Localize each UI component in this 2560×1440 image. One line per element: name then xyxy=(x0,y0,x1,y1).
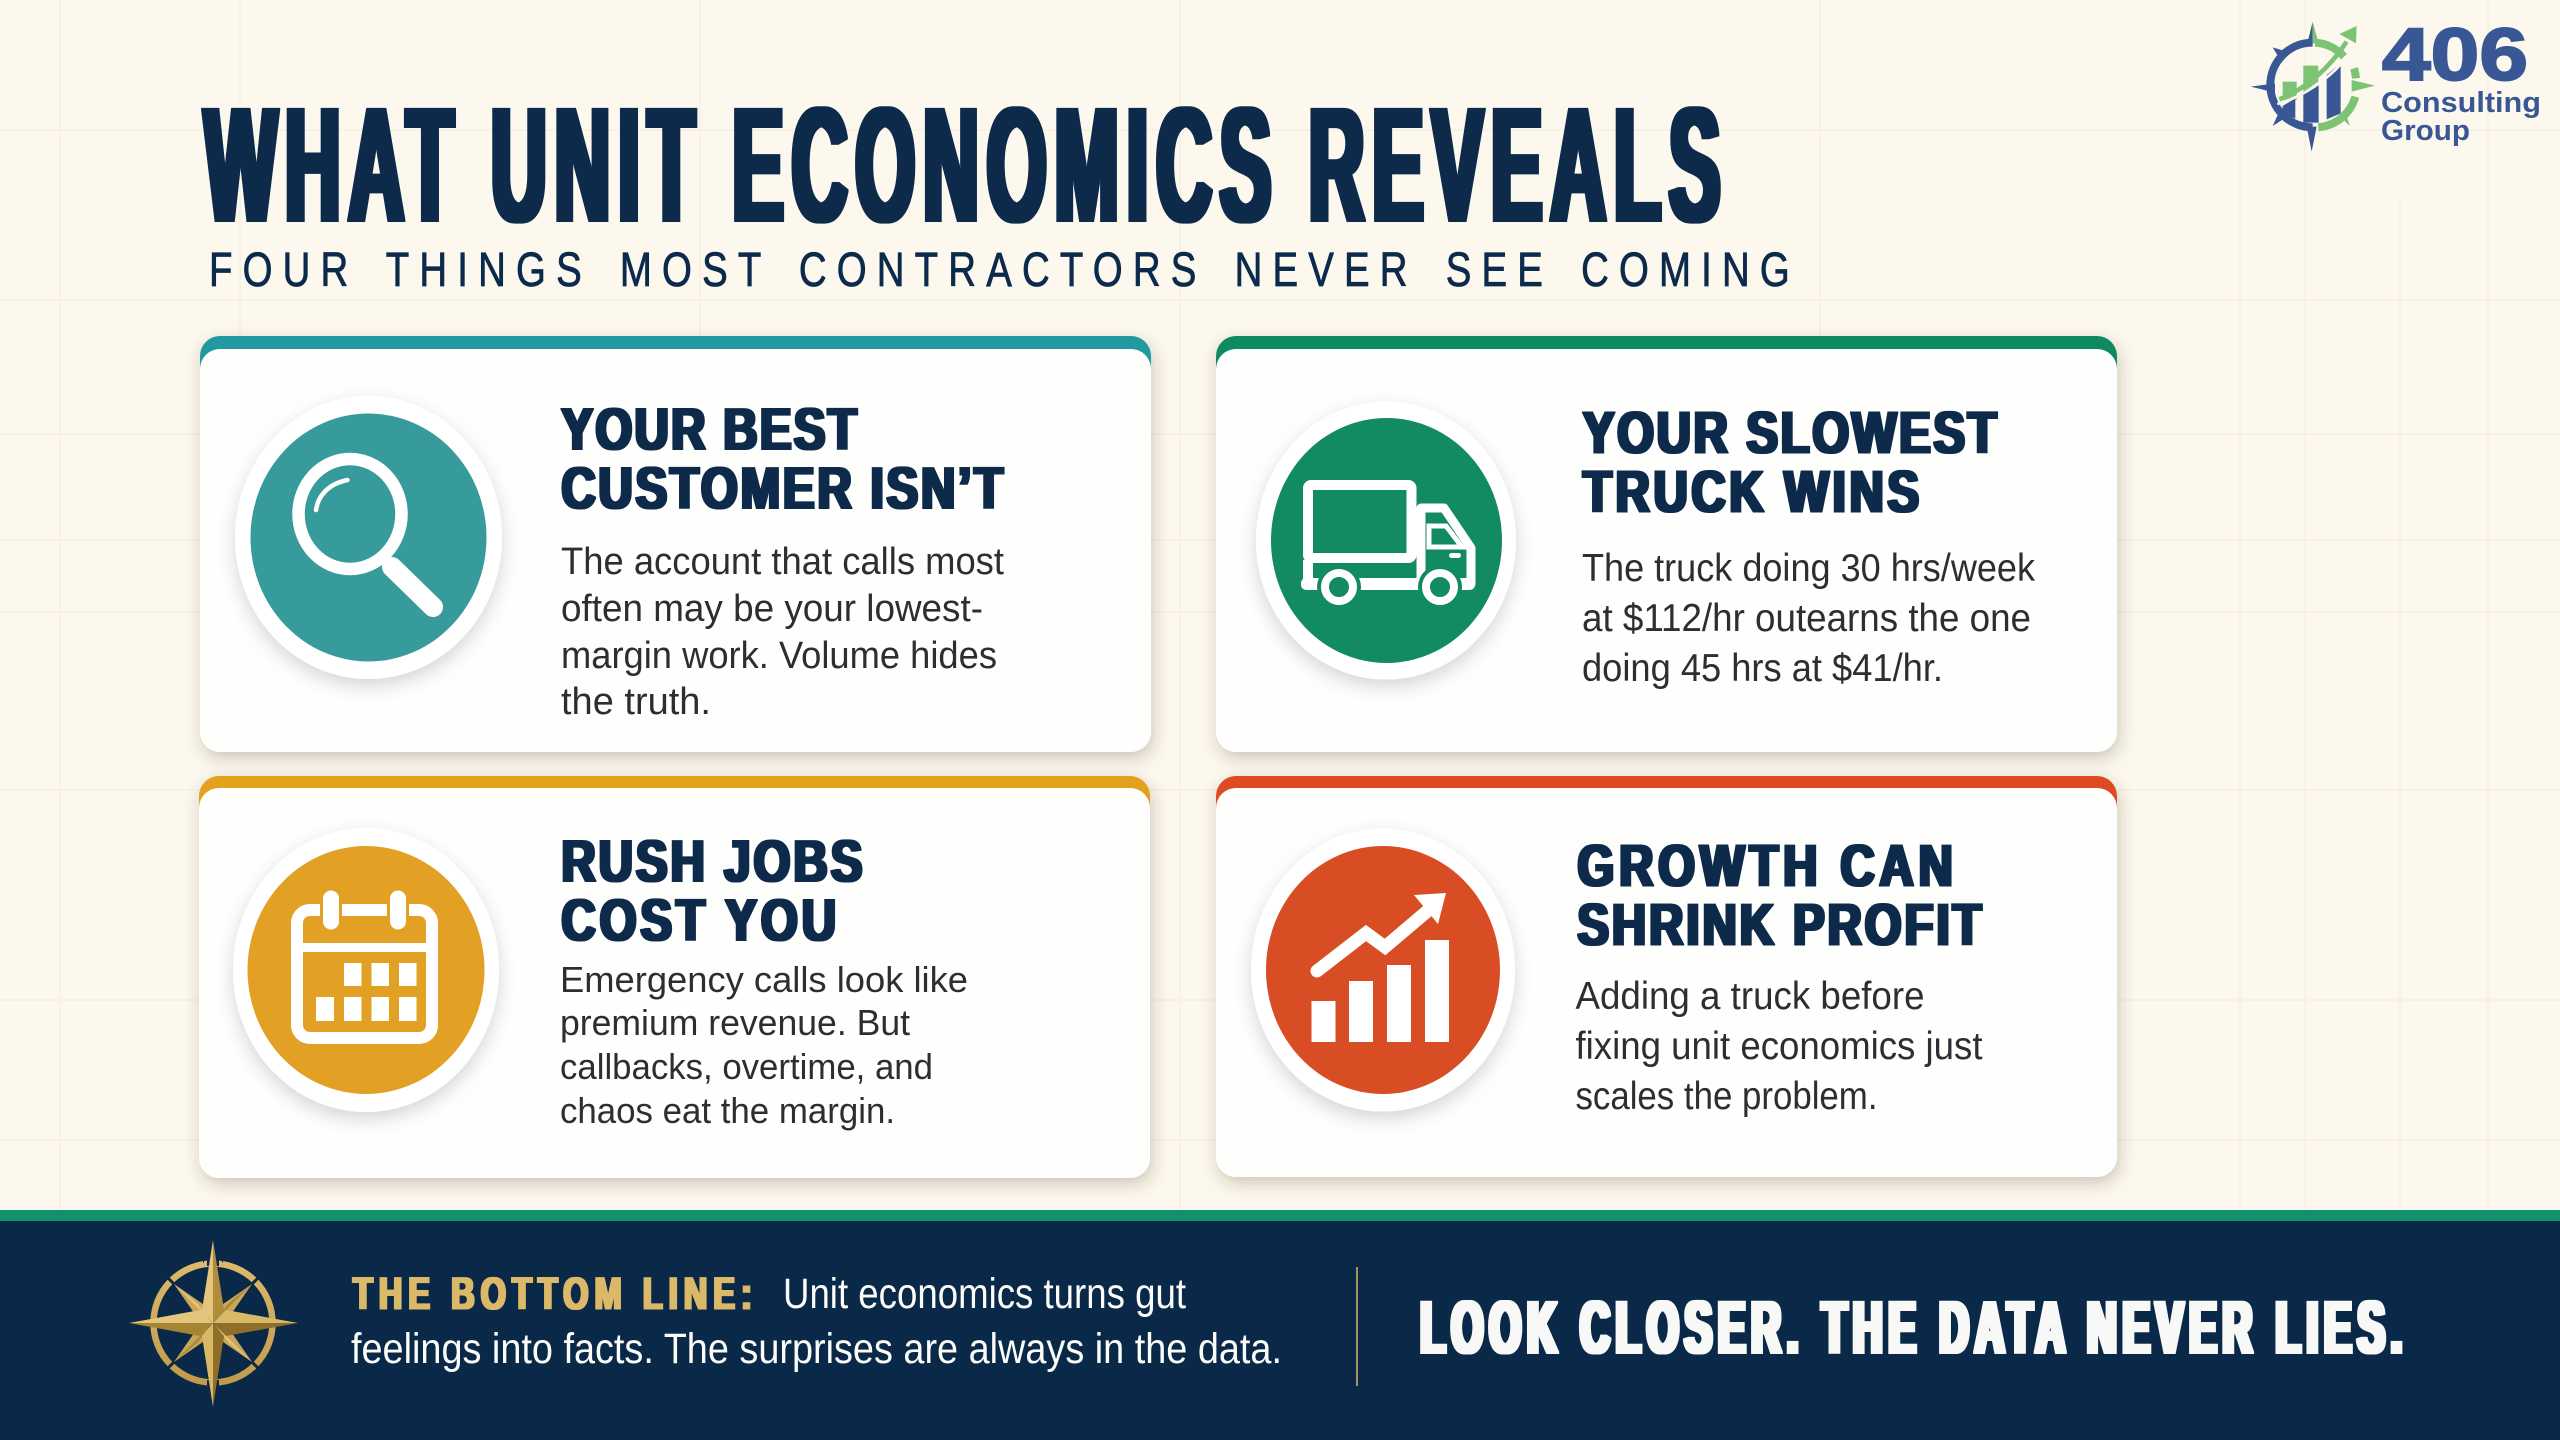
body text: fixing unit economics just xyxy=(1576,1025,1983,1068)
heading: TRUCK WINS xyxy=(1583,460,1919,525)
footer band xyxy=(0,1210,2560,1440)
icon: compass growth mark xyxy=(2251,22,2375,152)
body text xyxy=(1576,975,1983,1118)
heading: CUSTOMER ISN’T xyxy=(562,457,1003,522)
card background xyxy=(200,336,1151,752)
bottom line text: feelings into facts. The surprises are always in the data. xyxy=(351,1325,1282,1373)
heading: YOUR BEST xyxy=(562,398,857,463)
panel: your best customer xyxy=(200,336,1151,752)
heading: RUSH JOBS xyxy=(562,830,862,895)
heading: YOUR SLOWEST xyxy=(1583,401,1997,466)
body text: Emergency calls look like xyxy=(560,959,968,1000)
card background xyxy=(199,776,1150,1178)
body text: Adding a truck before xyxy=(1576,975,1924,1018)
heading: SHRINK PROFIT xyxy=(1578,893,1982,958)
bottom line text xyxy=(351,1270,1282,1373)
body text: scales the problem. xyxy=(1576,1075,1878,1118)
subtitle: FOUR THINGS MOST CONTRACTORS NEVER SEE COMING xyxy=(209,244,1790,297)
body text: premium revenue. But xyxy=(560,1002,910,1043)
heading xyxy=(562,398,1003,522)
heading xyxy=(1578,834,1982,958)
body text: callbacks, overtime, and xyxy=(560,1046,933,1087)
logo wordmark: 406 xyxy=(2382,13,2528,96)
body text: margin work. Volume hides xyxy=(561,635,997,677)
body text xyxy=(1582,547,2035,690)
body text: doing 45 hrs at $41/hr. xyxy=(1582,647,1943,690)
panel: growth can shrink profit xyxy=(1216,776,2117,1177)
icon: magnifying glass xyxy=(235,396,502,679)
body text xyxy=(560,959,968,1131)
body text: the truth. xyxy=(561,681,711,723)
logo: 406 Consulting Group xyxy=(2251,13,2541,152)
logo wordmark: Consulting xyxy=(2381,87,2541,119)
card background xyxy=(1216,776,2117,1177)
body text: The truck doing 30 hrs/week xyxy=(1582,547,2035,590)
heading xyxy=(1583,401,1997,525)
logo wordmark xyxy=(2381,13,2541,147)
icon: calendar xyxy=(233,828,499,1112)
heading: COST YOU xyxy=(562,889,836,954)
body text: at $112/hr outearns the one xyxy=(1582,597,2031,640)
icon: growth chart xyxy=(1251,828,1515,1112)
body text xyxy=(561,541,1004,723)
bottom line text: THE BOTTOM LINE: xyxy=(353,1270,752,1319)
body text: The account that calls most xyxy=(561,541,1004,583)
body text: chaos eat the margin. xyxy=(560,1090,895,1131)
body text: often may be your lowest- xyxy=(561,588,983,630)
heading xyxy=(562,830,862,954)
icon: truck xyxy=(1256,402,1516,680)
title: WHAT UNIT ECONOMICS REVEALS xyxy=(204,74,1720,256)
icon: gold compass rose xyxy=(129,1240,298,1407)
heading: GROWTH CAN xyxy=(1578,834,1953,899)
logo wordmark: Group xyxy=(2381,115,2470,147)
closing tagline: LOOK CLOSER. THE DATA NEVER LIES. xyxy=(1420,1286,2402,1369)
panel: your slowest truck xyxy=(1216,336,2117,752)
panel: rush jobs xyxy=(199,776,1150,1178)
bottom line text: Unit economics turns gut xyxy=(783,1270,1186,1318)
card background xyxy=(1216,336,2117,752)
